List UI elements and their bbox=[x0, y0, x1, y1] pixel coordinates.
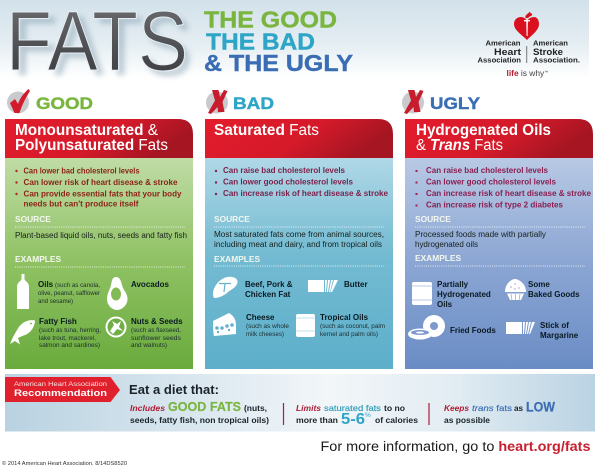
example: some baked goods: Baked Goods bbox=[528, 290, 580, 299]
recommendation: trans fats low: trans fats bbox=[472, 404, 512, 413]
recommendation: saturated fats limit: % bbox=[365, 412, 371, 419]
recommendation: trans fats low: LOW bbox=[526, 400, 555, 414]
examples: ugly bbox=[408, 253, 585, 340]
example: nuts and seeds: and walnuts) bbox=[131, 342, 167, 349]
logo: American Heart Association / American Stroke Association: American bbox=[533, 40, 568, 48]
icon: cheese bbox=[213, 313, 236, 336]
icon: oil bottle bbox=[17, 274, 29, 309]
icon: fish bbox=[10, 320, 35, 344]
risks list: ugly: Can increase risk of heart disease & stroke bbox=[426, 189, 591, 198]
example: fatty fish: Fatty Fish bbox=[39, 317, 77, 326]
example: partially hydrogenated oils: Hydrogenated bbox=[437, 290, 491, 299]
source: good: SOURCE bbox=[15, 214, 51, 224]
example: butter: Butter bbox=[344, 280, 368, 289]
icon: tropical oil can bbox=[296, 314, 315, 337]
panel body: bad bbox=[205, 158, 393, 369]
source: ugly bbox=[415, 214, 585, 249]
heading: GOOD bbox=[7, 89, 93, 114]
logo: American Heart Association / American Stroke Association: ™ bbox=[544, 70, 548, 74]
logo: American Heart Association / American Stroke Association: American bbox=[486, 40, 520, 48]
source: ugly: hydrogenated oils bbox=[415, 240, 478, 249]
logo: American Heart Association / American Stroke Association: life is why bbox=[506, 68, 544, 78]
recommendation: saturated fats limit: to no bbox=[384, 404, 405, 413]
example: oils: Oils bbox=[38, 280, 54, 289]
panel header: hydrogenated oils and trans fats: Hydrogenated Oils bbox=[416, 122, 551, 139]
recommendation: trans fats low bbox=[444, 400, 555, 425]
example: tropical oils bbox=[320, 313, 385, 338]
example: oils: and sesame) bbox=[38, 298, 73, 305]
logo: American Heart Association / American Stroke Association bbox=[478, 12, 580, 78]
recommendation: saturated fats limit: 5-6 bbox=[341, 411, 365, 428]
risks list: bad: Can increase risk of heart disease & stroke bbox=[223, 189, 388, 198]
source: ugly: Processed foods made with partially bbox=[415, 230, 546, 239]
panel: ugly fats bbox=[405, 119, 593, 369]
example: beef, pork and chicken fat: Beef, Pork & bbox=[245, 280, 293, 289]
example: beef, pork and chicken fat: Chicken Fat bbox=[245, 290, 291, 299]
recommendation band bbox=[5, 374, 595, 432]
example: cheese: (such as whole bbox=[246, 323, 290, 330]
recommendation: saturated fats limit bbox=[296, 404, 418, 428]
panel header: monounsaturated and polyunsaturated fats: Polyunsaturated Fats bbox=[15, 137, 168, 154]
arrow: american heart association recommendation: American Heart Association bbox=[14, 381, 107, 388]
heading: UGLY: UGLY bbox=[430, 95, 480, 113]
example: oils bbox=[38, 280, 100, 305]
icon: cupcake bbox=[505, 279, 526, 300]
examples: bad bbox=[213, 254, 385, 338]
example: stick of margarine bbox=[540, 321, 579, 340]
recommendation: trans fats low: as bbox=[514, 404, 524, 413]
examples: bad: EXAMPLES bbox=[214, 254, 260, 264]
heading: UGLY bbox=[402, 90, 480, 114]
title: FATS: FATS bbox=[13, 0, 193, 93]
subtitle: the good, the bad and the ugly: THE GOOD bbox=[204, 6, 337, 32]
panel: good fats bbox=[5, 119, 193, 369]
icon: heart and torch bbox=[514, 12, 539, 40]
panel header: hydrogenated oils and trans fats bbox=[405, 119, 593, 158]
panel body: ugly bbox=[405, 158, 593, 369]
example: fried foods: Fried Foods bbox=[450, 326, 496, 335]
logo: American Heart Association / American Stroke Association: Association. bbox=[533, 58, 580, 64]
example: cheese: milk cheeses) bbox=[246, 331, 284, 338]
example: fatty fish: (such as tuna, herring, bbox=[39, 327, 101, 334]
example: oils: (such as canola, bbox=[55, 282, 100, 289]
source: bad: SOURCE bbox=[214, 214, 250, 224]
recommendation: trans fats low: as possible bbox=[444, 416, 490, 425]
examples: good: EXAMPLES bbox=[15, 254, 61, 264]
example: tropical oils: Tropical Oils bbox=[320, 313, 369, 322]
more information link: For more information, go to heart.org/fats bbox=[320, 439, 590, 454]
example: nuts and seeds: (such as flaxseed, bbox=[131, 327, 181, 334]
source: ugly: SOURCE bbox=[415, 214, 451, 224]
source: bad: including meat and dairy, and from tropical oils bbox=[214, 240, 382, 249]
icon: walnut bbox=[106, 316, 126, 338]
example: avocados: Avocados bbox=[131, 280, 169, 289]
benefits list: good bbox=[15, 166, 182, 208]
recommendation: saturated fats limit: of calories bbox=[375, 416, 418, 425]
panel header: monounsaturated and polyunsaturated fats bbox=[5, 119, 193, 158]
example: nuts and seeds: Nuts & Seeds bbox=[131, 317, 183, 326]
example: stick of margarine: Stick of bbox=[540, 321, 569, 330]
icon: avocado bbox=[107, 277, 128, 310]
example: oils: olive, peanut, safflower bbox=[38, 290, 100, 297]
recommendation: good fats: GOOD FATS bbox=[168, 399, 241, 414]
subtitle: the good, the bad and the ugly bbox=[204, 6, 353, 76]
recommendation: good fats: Includes bbox=[130, 404, 165, 413]
icon: oil can bbox=[412, 282, 432, 305]
example: some baked goods bbox=[528, 280, 580, 299]
recommendation: good fats: (nuts, bbox=[244, 404, 267, 413]
header background bbox=[0, 0, 589, 78]
examples: good bbox=[10, 254, 185, 349]
panel header: hydrogenated oils and trans fats: & Trans Fats bbox=[416, 137, 503, 154]
subtitle: the good, the bad and the ugly: THE BAD bbox=[206, 28, 315, 54]
example: tropical oils: (such as coconut, palm bbox=[320, 323, 385, 330]
example: tropical oils: kernel and palm oils) bbox=[320, 331, 378, 338]
risks list: bad bbox=[215, 166, 388, 198]
arrow: american heart association recommendation: Recommendation bbox=[14, 388, 107, 399]
copyright: © 2014 American Heart Association. 8/14DS8520 bbox=[2, 460, 127, 467]
benefits list: good: needs but can't produce itself bbox=[24, 200, 139, 208]
example: some baked goods: Some bbox=[528, 280, 550, 289]
benefits list: good: Can lower risk of heart disease & stroke bbox=[24, 178, 178, 187]
example: cheese bbox=[246, 313, 290, 338]
icon: donuts bbox=[408, 315, 445, 340]
benefits list: good: Can lower bad cholesterol levels bbox=[24, 166, 140, 176]
panel header: saturated fats: Saturated Fats bbox=[214, 122, 319, 139]
icon: margarine stick bbox=[506, 322, 535, 334]
example: fatty fish: lake trout, mackerel, bbox=[39, 335, 96, 342]
risks list: ugly: Can lower good cholesterol levels bbox=[426, 178, 556, 186]
panel: bad fats bbox=[205, 119, 393, 369]
recommendation: saturated fats limit: Limits bbox=[296, 404, 321, 413]
example: nuts and seeds bbox=[131, 317, 183, 349]
recommendation: good fats: seeds, fatty fish, non tropical oils) bbox=[130, 416, 269, 425]
heading: eat a diet that: Eat a diet that: bbox=[129, 382, 219, 397]
example: fatty fish bbox=[39, 317, 101, 349]
icon: steak bbox=[213, 277, 238, 298]
source: bad bbox=[214, 214, 384, 249]
recommendation: trans fats low: Keeps bbox=[444, 404, 469, 413]
panel header: saturated fats bbox=[205, 119, 393, 158]
panel body: good bbox=[5, 158, 193, 369]
example: beef, pork and chicken fat bbox=[245, 280, 293, 299]
examples: ugly: EXAMPLES bbox=[415, 253, 461, 263]
example: stick of margarine: Margarine bbox=[540, 331, 579, 340]
heading: GOOD: GOOD bbox=[36, 95, 93, 113]
logo: American Heart Association / American Stroke Association: Heart bbox=[494, 47, 522, 58]
example: partially hydrogenated oils: Oils bbox=[437, 300, 453, 309]
heading: BAD bbox=[206, 90, 274, 114]
risks list: ugly: Can increase risk of type 2 diabetes bbox=[426, 200, 563, 210]
risks list: bad: Can lower good cholesterol levels bbox=[223, 178, 353, 186]
risks list: ugly: Can raise bad cholesterol levels bbox=[426, 166, 548, 175]
risks list: bad: Can raise bad cholesterol levels bbox=[223, 166, 345, 175]
example: partially hydrogenated oils: Partially bbox=[437, 280, 469, 289]
recommendation: good fats bbox=[130, 399, 269, 425]
example: partially hydrogenated oils bbox=[437, 280, 491, 309]
recommendation: saturated fats limit: saturated fats bbox=[324, 404, 381, 413]
example: fatty fish: salmon and sardines) bbox=[39, 342, 100, 349]
benefits list: good: Can provide essential fats that your body bbox=[24, 190, 182, 198]
source: good: Plant-based liquid oils, nuts, seeds and fatty fish bbox=[15, 231, 187, 240]
example: cheese: Cheese bbox=[246, 313, 275, 322]
logo: American Heart Association / American Stroke Association: Association bbox=[478, 58, 521, 64]
recommendation: saturated fats limit: more than bbox=[296, 416, 338, 425]
subtitle: the good, the bad and the ugly: & THE UGLY bbox=[204, 50, 353, 76]
example: nuts and seeds: sunflower seeds bbox=[131, 335, 181, 342]
arrow: american heart association recommendation bbox=[5, 377, 120, 402]
logo: American Heart Association / American Stroke Association: Stroke bbox=[533, 47, 563, 58]
source: good bbox=[15, 214, 187, 240]
panel header: monounsaturated and polyunsaturated fats: Monounsaturated & bbox=[15, 122, 159, 139]
risks list: ugly bbox=[416, 166, 591, 210]
icon: butter bbox=[308, 280, 338, 292]
heading: BAD: BAD bbox=[233, 95, 274, 113]
source: bad: Most saturated fats come from animal sources, bbox=[214, 230, 384, 239]
